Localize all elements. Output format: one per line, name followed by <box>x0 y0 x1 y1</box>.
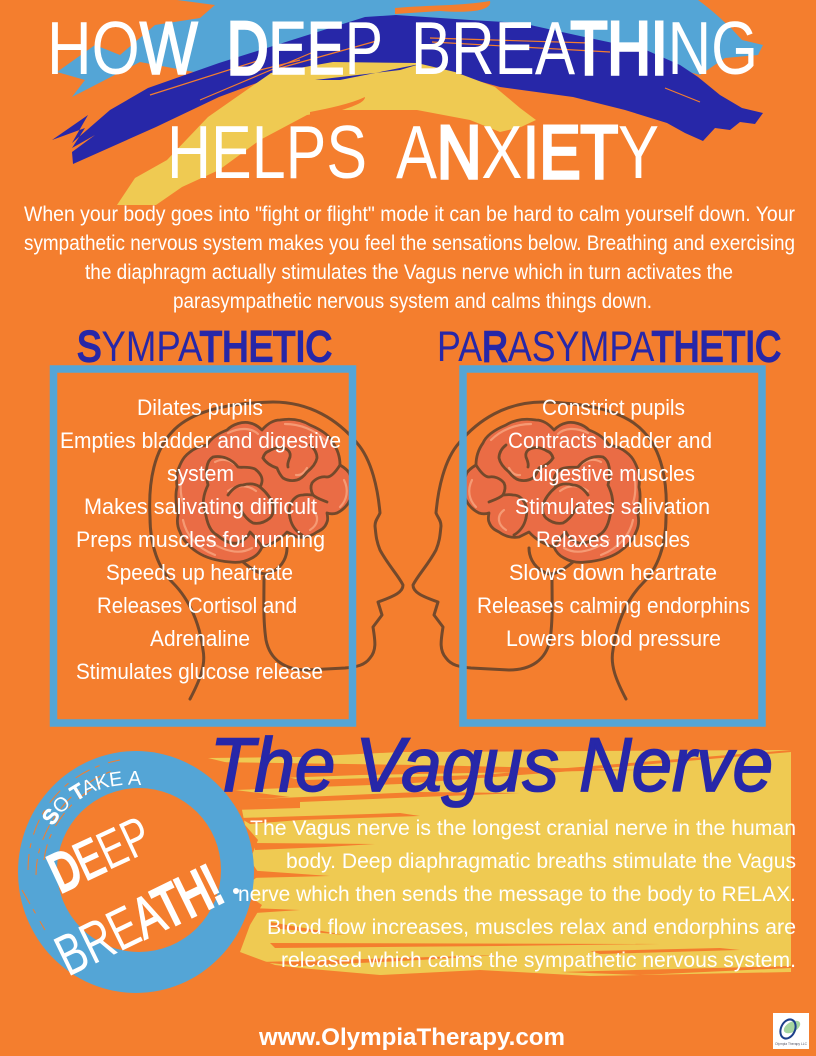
vagus nerve paragraph: Blood flow increases, muscles relax and endorphins are <box>267 916 796 939</box>
parasympathetic list: Slows down heartrate <box>509 560 717 585</box>
parasympathetic list <box>477 395 750 651</box>
parasympathetic list: Relaxes muscles <box>536 527 690 552</box>
badge text: BREATH! <box>45 853 232 989</box>
title: DEEP <box>227 6 383 90</box>
sympathetic list: Makes salivating difficult <box>84 494 317 519</box>
intro paragraph: the diaphragm actually stimulates the Vagus nerve which in turn activates the <box>85 261 733 284</box>
parasympathetic list: Constrict pupils <box>542 395 685 420</box>
sympathetic list: Speeds up heartrate <box>106 560 293 585</box>
panel: parasympathetic box <box>463 369 762 723</box>
vagus nerve paragraph: released which calms the sympathetic nervous system. <box>281 949 796 972</box>
heading: the vagus nerve: The Vagus Nerve <box>210 723 773 808</box>
badge text: SO TAKE A <box>42 771 142 824</box>
intro paragraph <box>24 203 795 313</box>
footer website: www.OlympiaTherapy.com <box>258 1024 565 1051</box>
sympathetic list: system <box>167 461 234 486</box>
vagus nerve paragraph: body. Deep diaphragmatic breaths stimulate the Vagus <box>286 850 796 873</box>
logo <box>773 1013 809 1049</box>
sympathetic list: Preps muscles for running <box>76 527 325 552</box>
heading: sympathetic: SYMPATHETIC <box>77 323 332 371</box>
sympathetic list: Releases Cortisol and <box>97 593 297 618</box>
sympathetic list: Dilates pupils <box>137 395 263 420</box>
heading: parasympathetic: PARASYMPATHETIC <box>437 323 781 371</box>
title: ANXIETY <box>396 110 659 194</box>
icon: left head with brain <box>150 402 403 699</box>
title: HELPS <box>167 110 367 194</box>
brush strokes behind title <box>52 0 763 205</box>
badge: so take a deep breath <box>18 751 254 993</box>
parasympathetic list: Lowers blood pressure <box>506 626 721 651</box>
icon: right head with brain <box>413 402 666 699</box>
parasympathetic list: Contracts bladder and <box>508 428 712 453</box>
vagus nerve paragraph: nerve which then sends the message to the body to RELAX. <box>238 883 796 906</box>
title: BREATHING <box>411 6 758 90</box>
title <box>47 6 758 194</box>
badge text: DEEP <box>40 805 160 904</box>
parasympathetic list: Releases calming endorphins <box>477 593 750 618</box>
title: HOW <box>47 6 198 90</box>
intro paragraph: parasympathetic nervous system and calms things down. <box>173 290 652 313</box>
panel: sympathetic box <box>54 369 352 723</box>
sympathetic list: Adrenaline <box>150 626 250 651</box>
sympathetic list: Empties bladder and digestive <box>60 428 341 453</box>
badge text <box>40 771 239 989</box>
vagus nerve paragraph <box>238 817 796 972</box>
logo: Olympia Therapy LLC <box>775 1041 807 1046</box>
parasympathetic list: Stimulates salivation <box>515 494 710 519</box>
yellow brush panel <box>208 750 791 976</box>
vagus nerve paragraph: The Vagus nerve is the longest cranial nerve in the human <box>250 817 796 840</box>
sympathetic list <box>60 395 341 684</box>
parasympathetic list: digestive muscles <box>532 461 695 486</box>
sympathetic list: Stimulates glucose release <box>76 659 323 684</box>
